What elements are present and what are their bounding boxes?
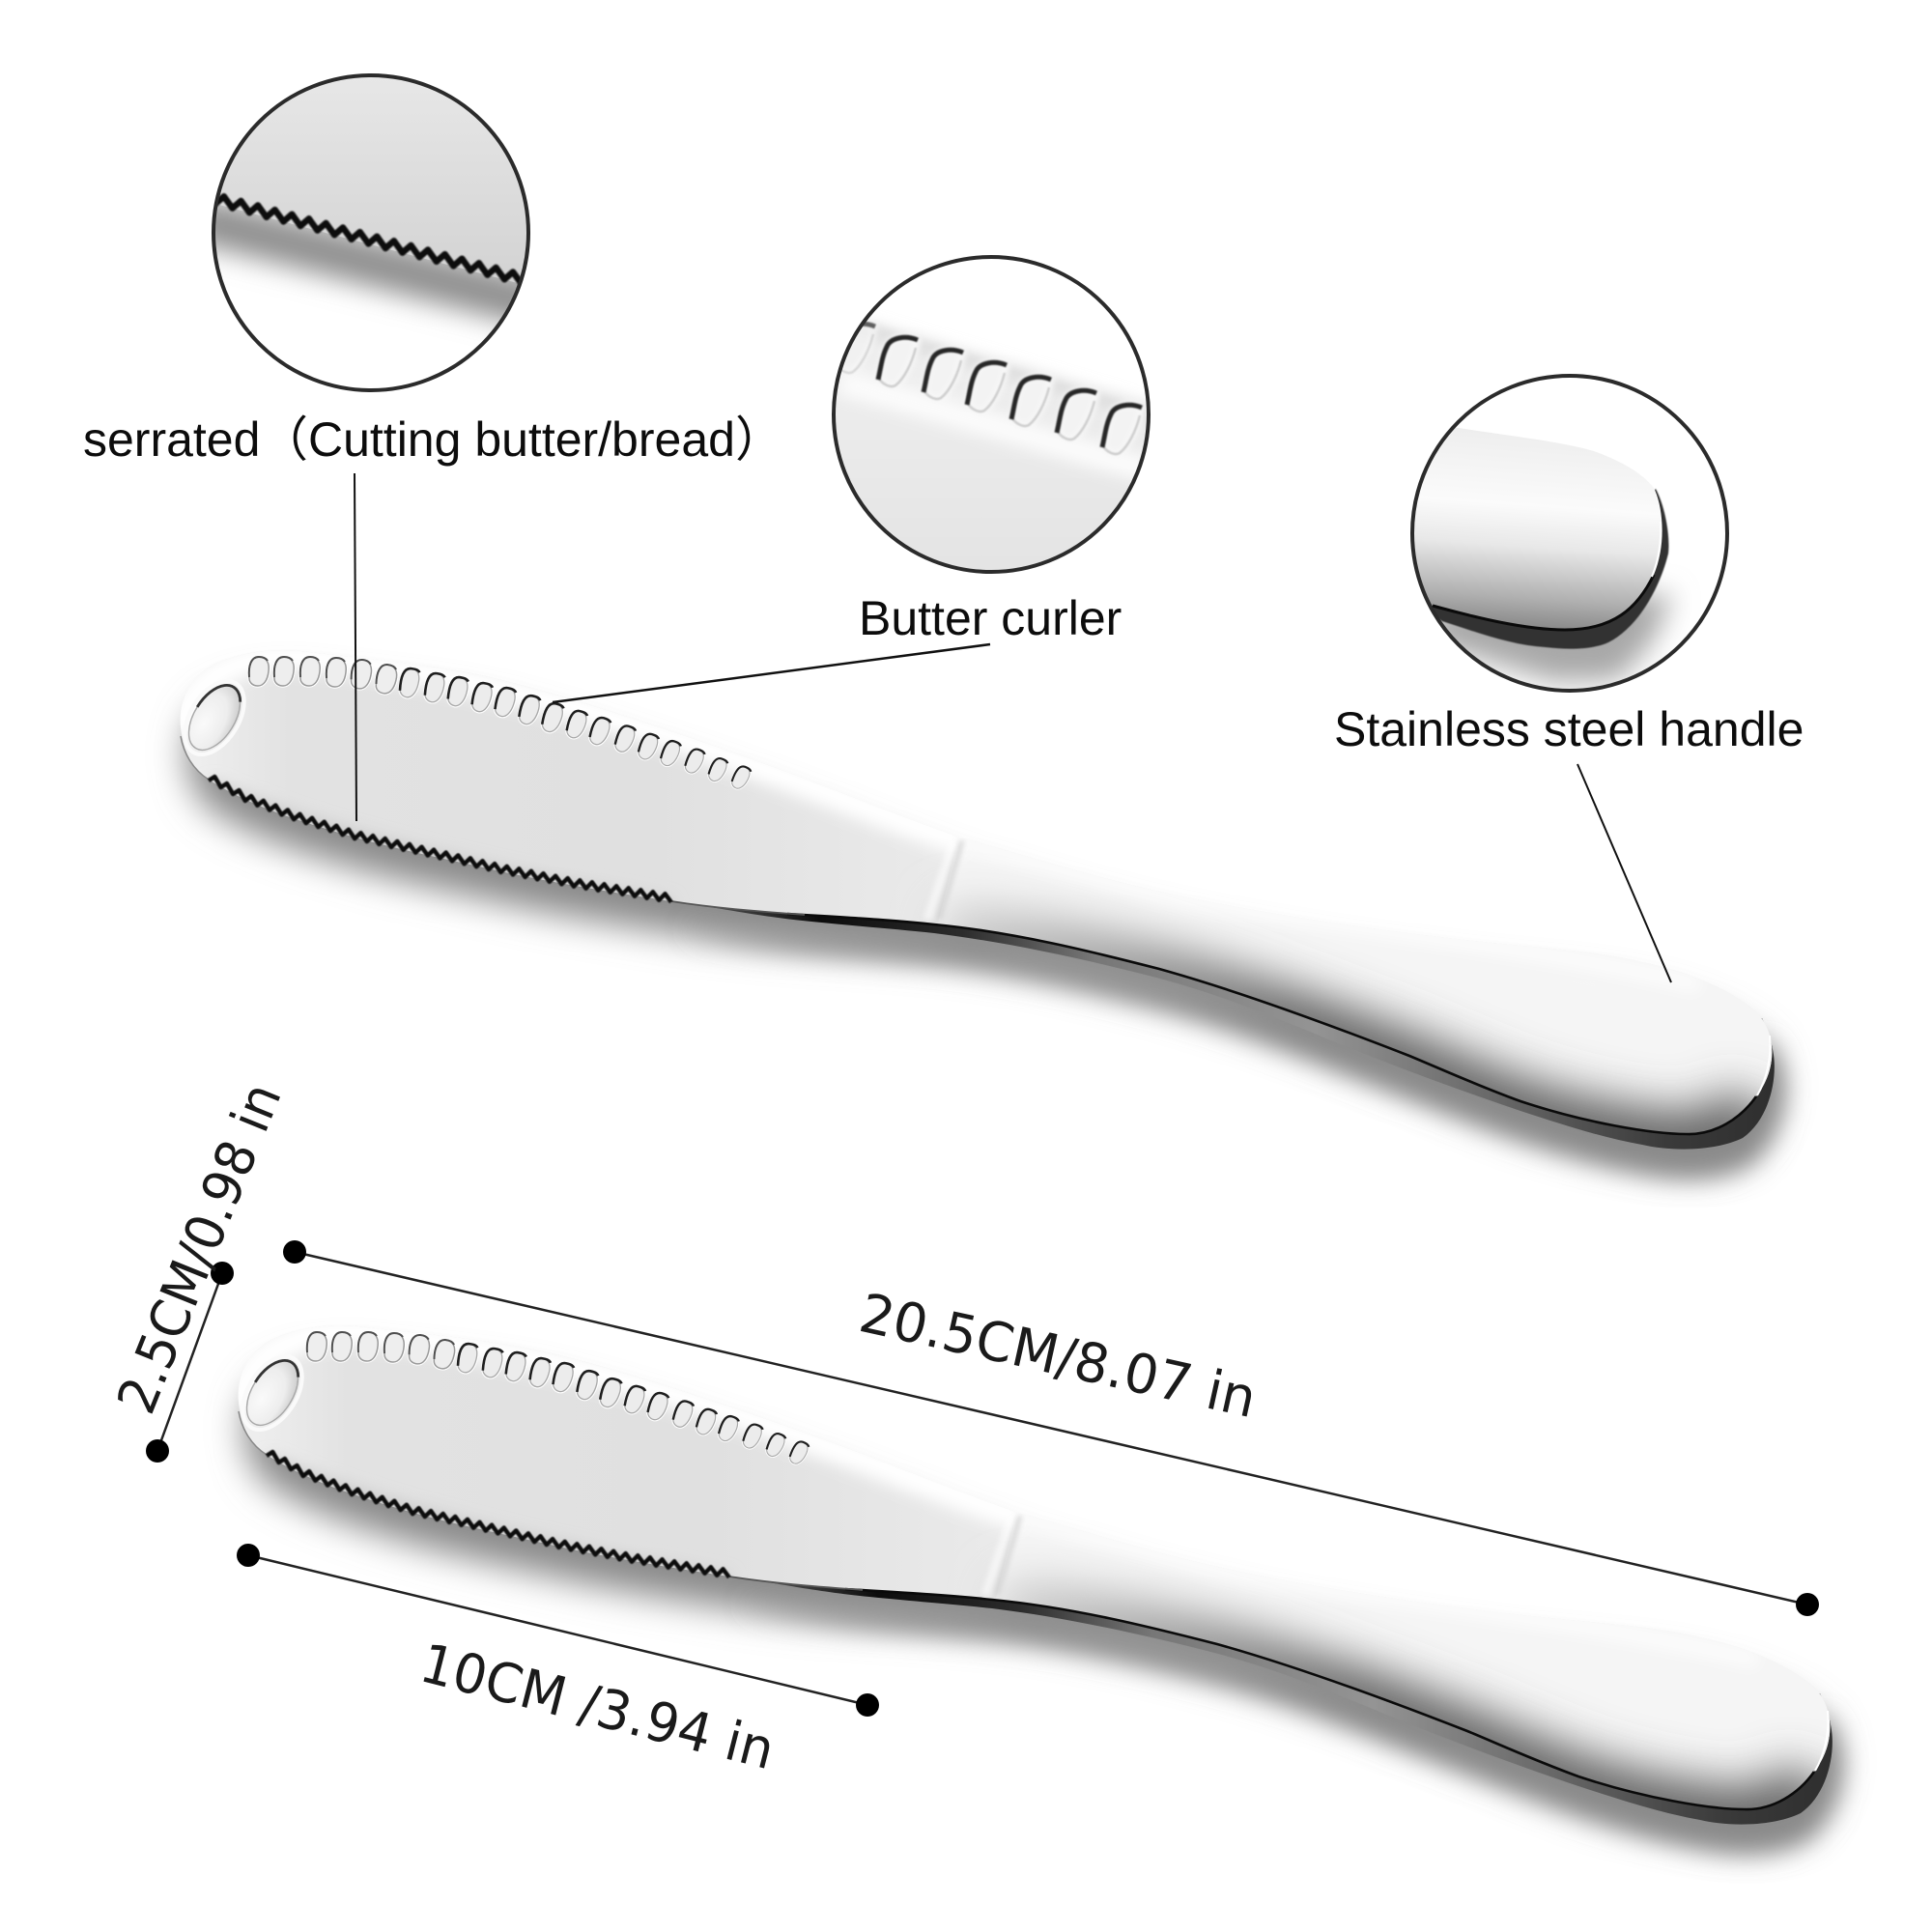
dimension: width 2.5CM: 2.5CM/0.98 in bbox=[105, 1074, 294, 1422]
zoom circle: butter curler bbox=[832, 255, 1151, 574]
leader line: serrated bbox=[355, 473, 356, 821]
label: serrated: （Cutting butter/bread） bbox=[260, 412, 783, 467]
dimension: blade 10CM: 10CM /3.94 in bbox=[414, 1633, 781, 1782]
leader line: handle bbox=[1577, 764, 1671, 982]
zoom circle: serrated edge bbox=[212, 73, 530, 392]
leader line: butter curler bbox=[553, 644, 990, 702]
dimension: blade 10CM bbox=[237, 1544, 879, 1782]
label: butter curler: Butter curler bbox=[859, 591, 1122, 645]
label: serrated: serrated bbox=[83, 412, 260, 467]
knife: bottom with dimensions bbox=[231, 1325, 1893, 1883]
dimension: length 20.5CM bbox=[283, 1240, 1819, 1616]
zoom circle: stainless steel handle bbox=[1401, 376, 1727, 691]
dimension: length 20.5CM: 20.5CM/8.07 in bbox=[854, 1282, 1262, 1431]
knife: top annotated bbox=[173, 650, 1835, 1208]
label: stainless steel handle: Stainless steel handle bbox=[1334, 702, 1804, 756]
